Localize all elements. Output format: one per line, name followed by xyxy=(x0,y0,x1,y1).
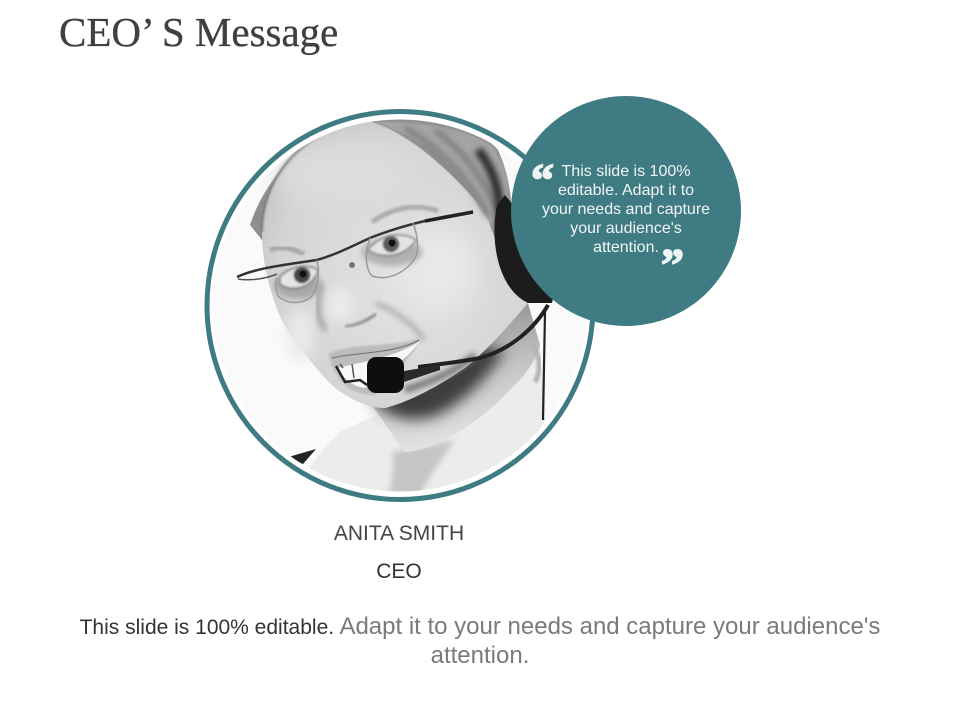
jaw shadow xyxy=(405,355,475,390)
glasses xyxy=(237,212,473,315)
title: CEO’ S Message xyxy=(59,9,338,55)
microphone boom xyxy=(418,305,548,367)
microphone foam xyxy=(367,357,404,393)
hair strands xyxy=(373,122,509,236)
teal ring xyxy=(207,112,593,500)
bubble text: editable. Adapt it to xyxy=(558,182,694,199)
photo: woman with headset xyxy=(236,120,553,492)
cable xyxy=(543,312,545,420)
neck xyxy=(372,303,540,452)
bubble text: attention. xyxy=(593,239,659,256)
eyebrows xyxy=(372,207,438,222)
shoulders and collar xyxy=(310,346,545,491)
eye shadows xyxy=(362,238,422,266)
nose xyxy=(319,285,326,330)
bubble text xyxy=(542,163,710,256)
portrait illustration xyxy=(204,109,595,502)
bottom caption: attention. xyxy=(431,642,529,669)
bubble text: your audience's xyxy=(570,220,682,237)
bubble text: This slide is 100% xyxy=(562,163,690,180)
bubble text: your needs and capture xyxy=(542,201,710,218)
face xyxy=(262,122,528,408)
mouth xyxy=(328,338,420,395)
hair back xyxy=(250,120,512,240)
eyes xyxy=(368,235,416,255)
headset band and ear pad xyxy=(494,195,560,303)
smile fold xyxy=(375,303,424,340)
closing quote mark: ” xyxy=(661,239,684,290)
role: CEO xyxy=(376,560,422,583)
name: ANITA SMITH xyxy=(334,522,464,545)
bottom caption: This slide is 100% editable. Adapt it to your needs and capture your audience's xyxy=(80,613,880,640)
bottom caption xyxy=(80,613,880,669)
quote bubble xyxy=(511,96,741,326)
opening quote mark: “ xyxy=(531,154,554,205)
